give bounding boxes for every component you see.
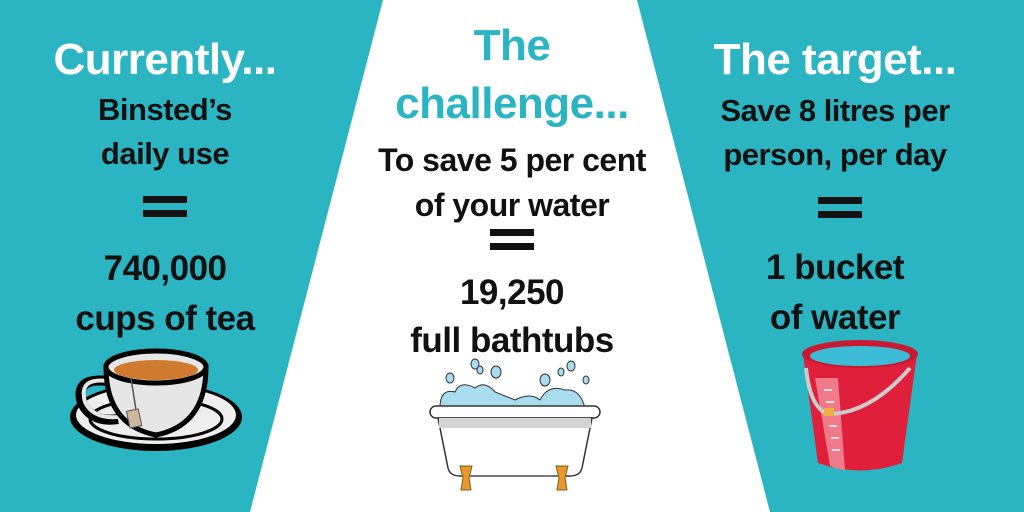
text: save 5 per cent: of your water bbox=[415, 187, 609, 223]
stat: bathtubs: full bathtubs bbox=[410, 321, 614, 360]
stat: bucket: 1 bucket bbox=[766, 248, 904, 287]
icon: bucket bbox=[802, 340, 918, 470]
text: daily use: daily use bbox=[101, 136, 229, 171]
heading: the challenge bbox=[395, 21, 629, 128]
text: save 5 per cent: To save 5 per cent bbox=[378, 142, 646, 178]
equals bbox=[818, 197, 862, 218]
stat: cups of tea bbox=[75, 249, 256, 338]
icon: teacup bbox=[70, 348, 242, 451]
heading: the target: The target... bbox=[714, 35, 956, 84]
text: save 8 litres bbox=[720, 93, 950, 172]
heading: the challenge: The bbox=[474, 21, 550, 70]
equals bbox=[143, 196, 187, 217]
heading: the challenge: challenge... bbox=[395, 79, 629, 128]
stat: bathtubs: 19,250 bbox=[460, 273, 564, 312]
panel: target bbox=[714, 35, 956, 470]
text: save 8 litres: Save 8 litres per bbox=[720, 93, 950, 128]
heading: currently: Currently... bbox=[53, 35, 276, 84]
equals bbox=[490, 229, 534, 250]
text: save 8 litres: person, per day bbox=[723, 137, 947, 172]
panel: challenge bbox=[378, 21, 646, 490]
stat: cups of tea: cups of tea bbox=[75, 299, 255, 338]
text: save 5 per cent bbox=[378, 142, 646, 223]
text: daily use bbox=[98, 92, 232, 171]
icon: bathtub bbox=[429, 358, 601, 490]
panel: currently bbox=[53, 35, 276, 451]
stat: bucket: of water bbox=[770, 298, 900, 337]
stat: cups of tea: 740,000 bbox=[103, 249, 227, 288]
text: daily use: Binsted’s bbox=[98, 92, 232, 127]
stat: bathtubs bbox=[410, 273, 614, 360]
stat: bucket bbox=[766, 248, 904, 337]
